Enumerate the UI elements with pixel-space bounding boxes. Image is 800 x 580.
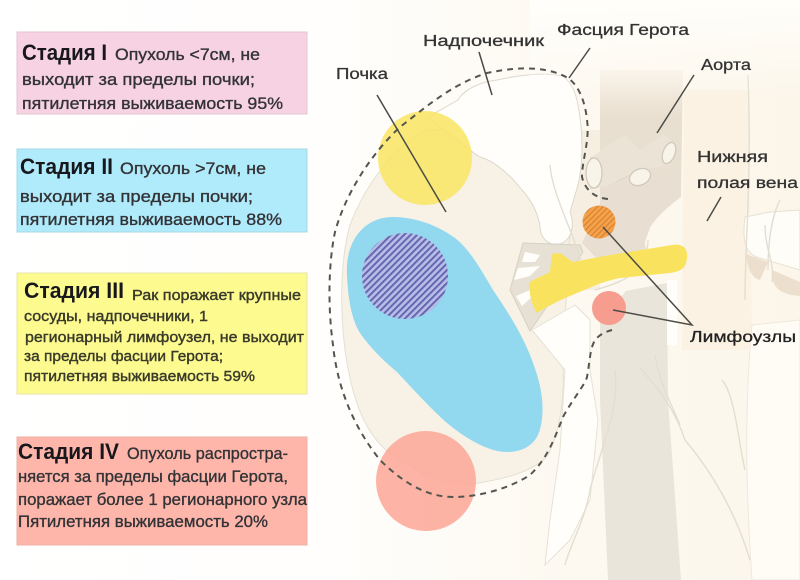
Gerota's fascia dashed outline — [329, 68, 612, 497]
text: stage III description: сосуды, надпочечники, 1 — [24, 308, 208, 325]
heading: Стадия II: Стадия II — [20, 154, 113, 179]
lymph node: orange — [582, 206, 616, 238]
top fade — [530, 0, 800, 100]
renal hilum — [510, 243, 583, 331]
white stripe beside aorta — [667, 280, 677, 345]
label: Нижняя полая вена with leader line: Нижняя — [697, 149, 768, 166]
label: Фасция Герота with leader line: Фасция Герота — [557, 22, 689, 39]
text: stage III description: регионарный лимфоузел, не выходит — [25, 329, 304, 346]
panel: Стадия II — [17, 149, 307, 232]
lower right tissue — [747, 320, 800, 580]
ureter and vessels — [532, 305, 598, 565]
label: Аорта with leader line: Аорта — [701, 57, 751, 74]
text: stage IV description — [18, 444, 308, 531]
aorta upper segment — [582, 70, 683, 262]
text: stage IV description: няется за пределы фасции Герота, — [18, 467, 288, 486]
thin vessels — [550, 75, 780, 565]
renal vein (yellow) — [529, 245, 687, 313]
lymph node: red — [592, 291, 626, 325]
label: Аорта with leader line — [657, 57, 751, 133]
label: Фасция Герота with leader line — [557, 22, 689, 78]
text: stage II description — [20, 159, 282, 229]
adrenal tumour zone (yellow circle) — [378, 111, 472, 205]
text: stage I description: выходит за пределы почки; — [22, 70, 255, 89]
upper right tissue — [744, 210, 800, 270]
text: stage I description: пятилетняя выживаемость 95% — [22, 94, 283, 113]
inferior vena cava — [682, 90, 752, 350]
label: Почка with leader line — [336, 66, 446, 212]
text: stage I description: Опухоль <7см, не — [115, 45, 260, 64]
panel: Стадия IV — [17, 437, 308, 545]
label: Лимфоузлы with leader lines — [603, 227, 796, 346]
text: stage II description: Опухоль >7см, не — [120, 159, 266, 178]
aorta lower segment — [600, 283, 681, 580]
kidney tumour zone (stage II) — [347, 217, 543, 452]
text: stage III description: пятилетняя выживаемость 59% — [24, 368, 255, 385]
text: stage II description: выходит за пределы почки; — [20, 187, 253, 206]
text: stage IV description: Опухоль распростра- — [127, 444, 288, 463]
heading: Стадия I: Стадия I — [22, 40, 107, 65]
text: stage III description: Рак поражает крупные — [132, 287, 301, 304]
text: stage III description: за пределы фасции Герота; — [24, 348, 223, 365]
label: Нижняя полая вена with leader line: полая вена — [697, 175, 798, 192]
panel: Стадия I — [17, 32, 307, 114]
heading: Стадия IV: Стадия IV — [18, 439, 119, 464]
label: Надпочечник with leader line: Надпочечник — [423, 33, 545, 50]
panel: Стадия III — [17, 273, 307, 394]
label: Надпочечник with leader line — [423, 33, 545, 95]
text: stage III description — [24, 287, 304, 385]
text: stage II description: пятилетняя выживаемость 88% — [20, 210, 282, 229]
text: stage IV description: Пятилетняя выживаемость 20% — [18, 512, 268, 531]
right tan patches — [746, 254, 800, 296]
metastasis zone (stage IV) — [376, 431, 476, 531]
panel: anatomy illustration — [329, 0, 800, 580]
kidney body — [342, 130, 570, 484]
heading: Стадия III: Стадия III — [24, 278, 124, 303]
cream abdomen area — [520, 130, 600, 290]
label: Лимфоузлы with leader lines: Лимфоузлы — [690, 329, 796, 346]
hatched tumour (stage I core) — [362, 233, 448, 319]
hilum white stripes — [514, 252, 540, 306]
aortic branches — [586, 134, 678, 189]
adrenal gland — [428, 74, 582, 244]
text: stage I description — [22, 45, 283, 113]
label: Почка with leader line: Почка — [336, 66, 388, 83]
label: Нижняя полая вена with leader line — [697, 149, 798, 221]
text: stage IV description: поражает более 1 регионарного узла — [18, 490, 308, 509]
